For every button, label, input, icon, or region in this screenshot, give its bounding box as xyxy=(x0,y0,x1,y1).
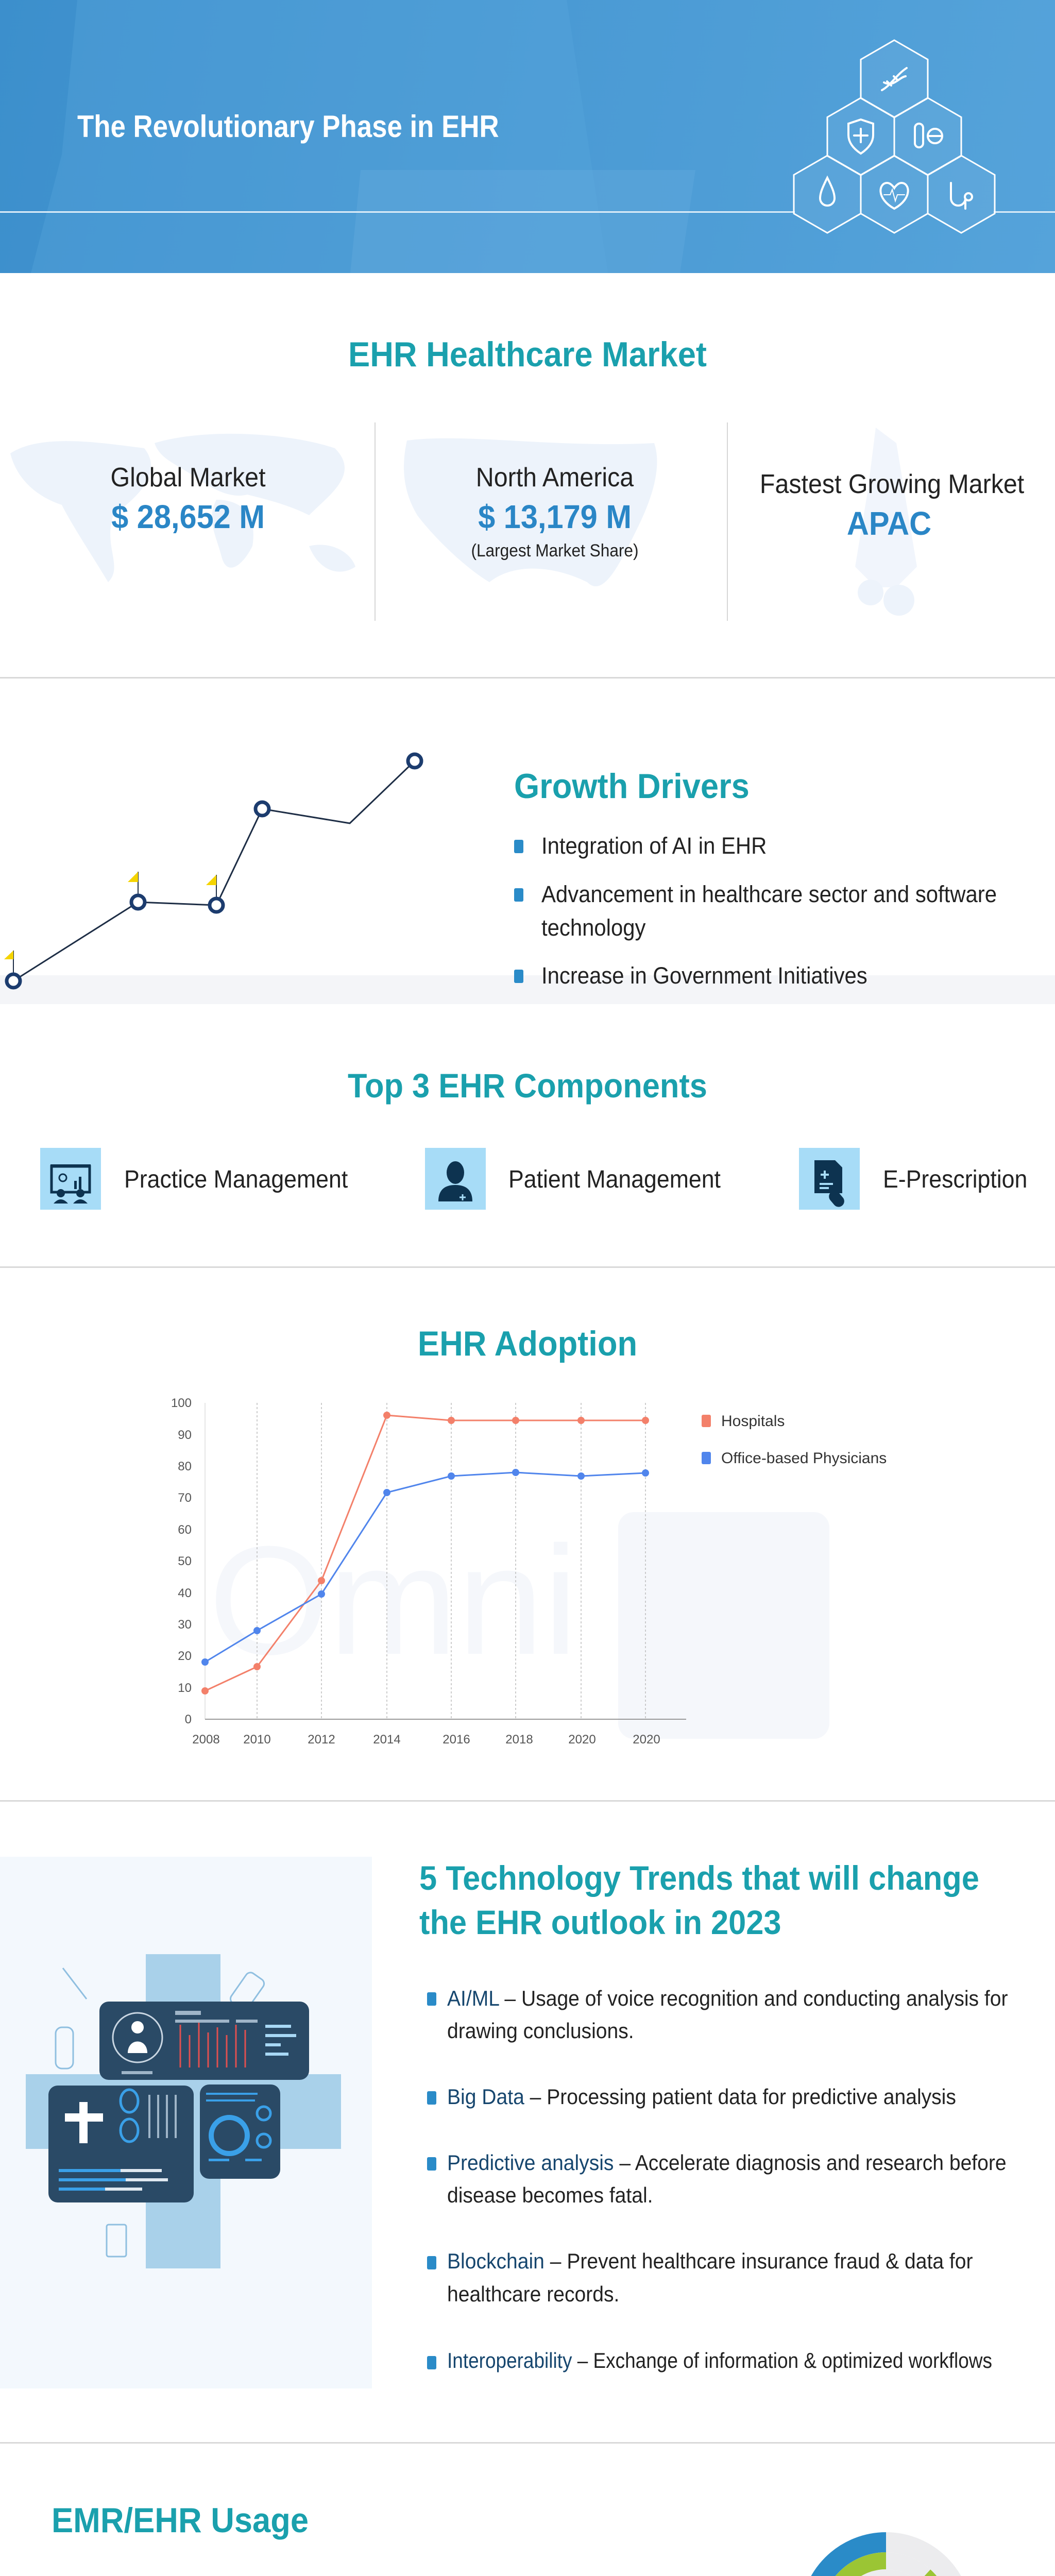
label: e-prescription: E-Prescription xyxy=(883,1166,1027,1193)
chart: donut xyxy=(811,2532,961,2576)
chart: EHR adoption line chart xyxy=(171,1396,887,1747)
stat: north america xyxy=(471,463,639,561)
chart: EHR adoption line chart: 2020 xyxy=(568,1733,596,1747)
list: growth drivers xyxy=(514,833,997,989)
icon: practice management xyxy=(40,1148,101,1210)
panel: components xyxy=(40,1148,1027,1210)
trend: blockchain: healthcare records. xyxy=(447,2282,619,2306)
icon: e-prescription xyxy=(799,1148,860,1210)
chart: EHR adoption line chart: 60 xyxy=(178,1523,192,1537)
chart: EHR adoption line chart: 40 xyxy=(178,1586,192,1600)
chart: EHR adoption line chart: 2020 xyxy=(633,1733,660,1747)
chart: growth line xyxy=(4,752,423,989)
chart: EHR adoption line chart: 90 xyxy=(178,1428,192,1442)
stat: global market: $ 28,652 M xyxy=(111,498,265,535)
header banner xyxy=(0,0,1055,273)
label: patient management: Patient Management xyxy=(508,1166,721,1193)
panel: market stats xyxy=(10,422,1024,621)
stat: north america: (Largest Market Share) xyxy=(471,541,639,561)
heading: 5 technology trends: the EHR outlook in 2023 xyxy=(419,1903,781,1941)
chart: EHR adoption line chart: 70 xyxy=(178,1491,192,1505)
stat: global market xyxy=(110,463,266,535)
trend: big data: Big Data – Processing patient data for predictive analysis xyxy=(447,2084,956,2109)
heading: 5 technology trends: 5 Technology Trends that will change xyxy=(419,1859,979,1897)
heading: top 3 EHR components: Top 3 EHR Components xyxy=(348,1066,707,1105)
heading: growth drivers: Growth Drivers xyxy=(514,767,750,806)
trend: AI/ML: drawing conclusions. xyxy=(447,2019,634,2043)
chart: EHR adoption line chart: 2016 xyxy=(443,1733,470,1747)
heading: EHR adoption: EHR Adoption xyxy=(418,1324,637,1363)
trend: blockchain xyxy=(427,2249,973,2306)
chart: EHR adoption line chart: 10 xyxy=(178,1681,192,1695)
heading: EHR Healthcare Market: EHR Healthcare Market xyxy=(348,335,707,374)
chart: EHR adoption line chart: 0 xyxy=(185,1713,192,1726)
list: technology trends xyxy=(427,1986,1008,2372)
list: growth drivers: technology xyxy=(541,914,645,941)
world map backdrop xyxy=(10,422,917,621)
grey band xyxy=(0,975,1055,1004)
chart: EHR adoption line chart: 50 xyxy=(178,1554,192,1568)
chart: EHR adoption line chart: 30 xyxy=(178,1618,192,1632)
trend: predictive analysis: disease becomes fatal. xyxy=(447,2183,653,2207)
trend: predictive analysis: Predictive analysis – Accelerate diagnosis and research before xyxy=(447,2150,1007,2175)
stat: global market: Global Market xyxy=(110,463,266,493)
chart: EHR adoption line chart: Omni xyxy=(209,1514,578,1687)
chart: EHR adoption line chart: 2008 xyxy=(192,1733,220,1747)
decorative doctor silhouette xyxy=(0,0,1055,273)
trend: interoperability: Interoperability – Exchange of information & optimized workflows xyxy=(447,2348,992,2372)
stat: fastest growing market xyxy=(760,469,1024,542)
stat: north america: $ 13,179 M xyxy=(478,498,632,535)
icon: hexagon cluster xyxy=(793,39,995,234)
list: growth drivers: Advancement in healthcare sector and software xyxy=(541,881,997,907)
trend: AI/ML: AI/ML – Usage of voice recognition and conducting analysis for xyxy=(447,1986,1008,2010)
panel: growth drivers xyxy=(0,752,1055,1004)
chart: EHR adoption line chart: 2018 xyxy=(505,1733,533,1747)
list: growth drivers: Integration of AI in EHR xyxy=(541,833,767,859)
label: practice management: Practice Management xyxy=(124,1166,348,1193)
stat: north america: North America xyxy=(476,463,634,493)
trend: predictive analysis xyxy=(427,2150,1007,2207)
chart: EHR adoption line chart: 2014 xyxy=(373,1733,401,1747)
chart: EHR adoption line chart: Office-based Physicians xyxy=(721,1450,887,1467)
title: The Revolutionary Phase in EHR xyxy=(77,109,499,144)
chart: EHR adoption line chart: 20 xyxy=(178,1649,192,1663)
stat: fastest growing market: Fastest Growing Market xyxy=(760,469,1024,499)
list: growth drivers: Increase in Government Initiatives xyxy=(541,962,867,989)
heading: 5 technology trends xyxy=(419,1859,979,1941)
chart: EHR adoption line chart: 2010 xyxy=(243,1733,271,1747)
chart: EHR adoption line chart: Hospitals xyxy=(721,1413,785,1430)
stat: fastest growing market: APAC xyxy=(847,505,931,542)
chart: EHR adoption line chart: 100 xyxy=(171,1396,192,1410)
panel: technology trends illustration xyxy=(0,1857,372,2388)
trend: blockchain: Blockchain – Prevent healthcare insurance fraud & data for xyxy=(447,2249,973,2273)
chart: EHR adoption line chart: 80 xyxy=(178,1460,192,1473)
trend: AI/ML xyxy=(427,1986,1008,2043)
heading: EMR/EHR usage: EMR/EHR Usage xyxy=(52,2501,309,2540)
icon: patient management xyxy=(425,1148,486,1210)
chart: EHR adoption line chart: 2012 xyxy=(308,1733,335,1747)
